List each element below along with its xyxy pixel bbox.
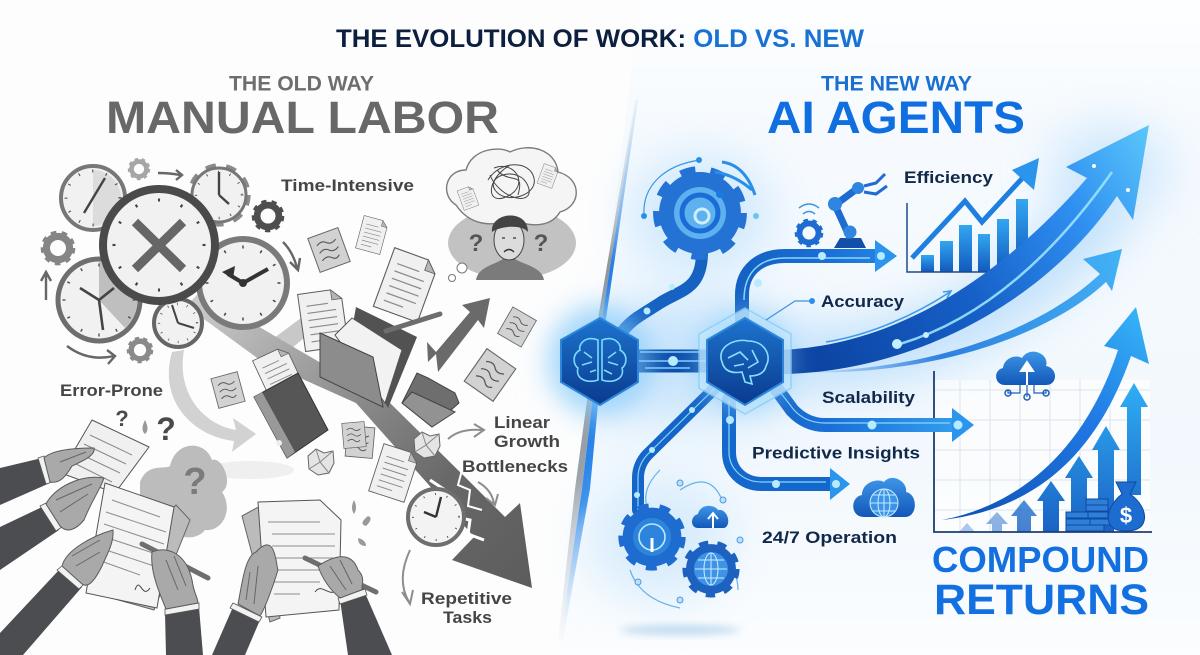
worried person thinking: [447, 148, 576, 282]
label: bottlenecks: Bottlenecks: [462, 458, 568, 476]
panel: the old way: [0, 72, 576, 655]
small folder: [402, 373, 459, 427]
connector: hex to hex: [610, 350, 745, 372]
icon: large gear with signal: [641, 157, 759, 254]
heading: compound returns: COMPOUND: [932, 539, 1149, 580]
bars: [921, 199, 1028, 272]
stacked documents: [242, 500, 341, 622]
pens: [142, 544, 376, 592]
icon: cloud globe: [853, 478, 915, 517]
sleeves: [0, 458, 392, 655]
confusion cloud: ?: [183, 461, 207, 503]
heading: the new way: THE NEW WAY: [821, 72, 972, 96]
label: linear growth: Growth: [494, 433, 560, 451]
zigzag up arrow: [427, 298, 490, 372]
flying papers and folders: [211, 216, 536, 604]
big descending arrow: [186, 292, 532, 588]
icon cluster: gears and cloud: [622, 470, 743, 608]
small arrows: [402, 424, 498, 604]
label: 24/7 operation: 24/7 Operation: [762, 529, 897, 547]
panel: the new way: [548, 72, 1170, 635]
clock large crossed: [103, 189, 215, 301]
worried person thinking: ?: [534, 230, 548, 257]
chart axes: [934, 371, 1152, 532]
money bag: $: [1120, 503, 1132, 528]
confusion cloud: [140, 446, 294, 537]
label: efficiency: Efficiency: [904, 169, 994, 187]
icon: robot arm: [796, 174, 887, 248]
label: predictive insights: Predictive Insights: [752, 444, 920, 462]
connector: lower left: [638, 387, 716, 510]
pipeline connectors: [610, 240, 974, 510]
chart grid: [934, 380, 1150, 532]
money bag: [1108, 482, 1145, 531]
clock right: [199, 239, 287, 327]
label: repetitive tasks: Repetitive: [421, 590, 512, 608]
question marks: ?: [469, 230, 483, 257]
open folder: [320, 307, 417, 408]
curved light arrow: [169, 350, 256, 452]
nodes on pipes: [634, 252, 962, 498]
hands and paperwork: ?: [156, 411, 176, 447]
icon: cloud upload: [996, 352, 1055, 400]
question marks: ?: [115, 406, 129, 431]
faded band: [258, 315, 316, 368]
crumpled paper: [308, 432, 440, 475]
arrow: scalability: [776, 388, 974, 442]
clock lower small: [154, 299, 202, 347]
flow lines: [620, 352, 740, 368]
heading: ai agents: AI AGENTS: [767, 92, 1025, 143]
chart: compound returns: [934, 307, 1152, 532]
callout: accuracy: Accuracy: [821, 293, 905, 311]
label: repetitive tasks: Tasks: [443, 609, 492, 627]
thought cloud: [447, 148, 576, 282]
callout: accuracy: [766, 293, 905, 320]
title: THE EVOLUTION OF WORK: OLD VS. NEW: [336, 25, 864, 53]
broken clock: [408, 489, 464, 545]
trend arrow: [912, 158, 1039, 258]
efficiency chart: [907, 158, 1039, 272]
arrow: efficiency: [742, 240, 897, 320]
clock top right: [192, 168, 246, 222]
heading: manual labor: MANUAL LABOR: [106, 92, 499, 143]
sticky notes: [211, 228, 536, 458]
hands: [44, 448, 364, 616]
main growth arrow: [770, 125, 1149, 374]
gear icons: [43, 159, 282, 362]
rising bars as arrows: [959, 383, 1148, 532]
sweat drops: [142, 420, 371, 546]
coins: [1066, 499, 1110, 531]
label: linear growth: Linear: [494, 414, 551, 432]
axes: [907, 203, 1002, 272]
clock top left: [61, 166, 125, 230]
document left: [61, 420, 149, 493]
icon: brain side view: [721, 340, 768, 384]
hexagon node: brain centre: [695, 308, 795, 414]
signed document: [86, 483, 190, 610]
rising curve arrow: [942, 307, 1149, 520]
connector: gear to hex: [620, 252, 702, 335]
pen: [386, 314, 440, 331]
thin swoosh arrow: [826, 291, 951, 342]
icon: brain: [574, 339, 626, 381]
heading: compound returns: RETURNS: [934, 576, 1149, 624]
hexagon node: brain left: [548, 306, 652, 416]
person: [476, 215, 544, 280]
clock lower left: [58, 259, 140, 341]
arrow: predictive insights: [729, 400, 850, 500]
shirt cuffs: [38, 456, 367, 622]
finger lines: [56, 452, 352, 604]
loose pages: [253, 216, 439, 502]
label: error-prone: Error-Prone: [60, 382, 163, 400]
divider: [558, 100, 638, 640]
cycle arrows: [41, 170, 300, 364]
label: scalability: Scalability: [822, 389, 916, 407]
clock cluster: [41, 159, 300, 364]
binder: [254, 373, 328, 458]
label: time-intensive: Time-Intensive: [281, 177, 414, 195]
heading: the old way: THE OLD WAY: [229, 72, 374, 96]
background: left side: [0, 0, 640, 655]
second growth arrow: [790, 249, 1122, 373]
soft glows: [560, 125, 1170, 635]
hands and paperwork: [0, 406, 392, 655]
background: right side: [560, 0, 1200, 655]
